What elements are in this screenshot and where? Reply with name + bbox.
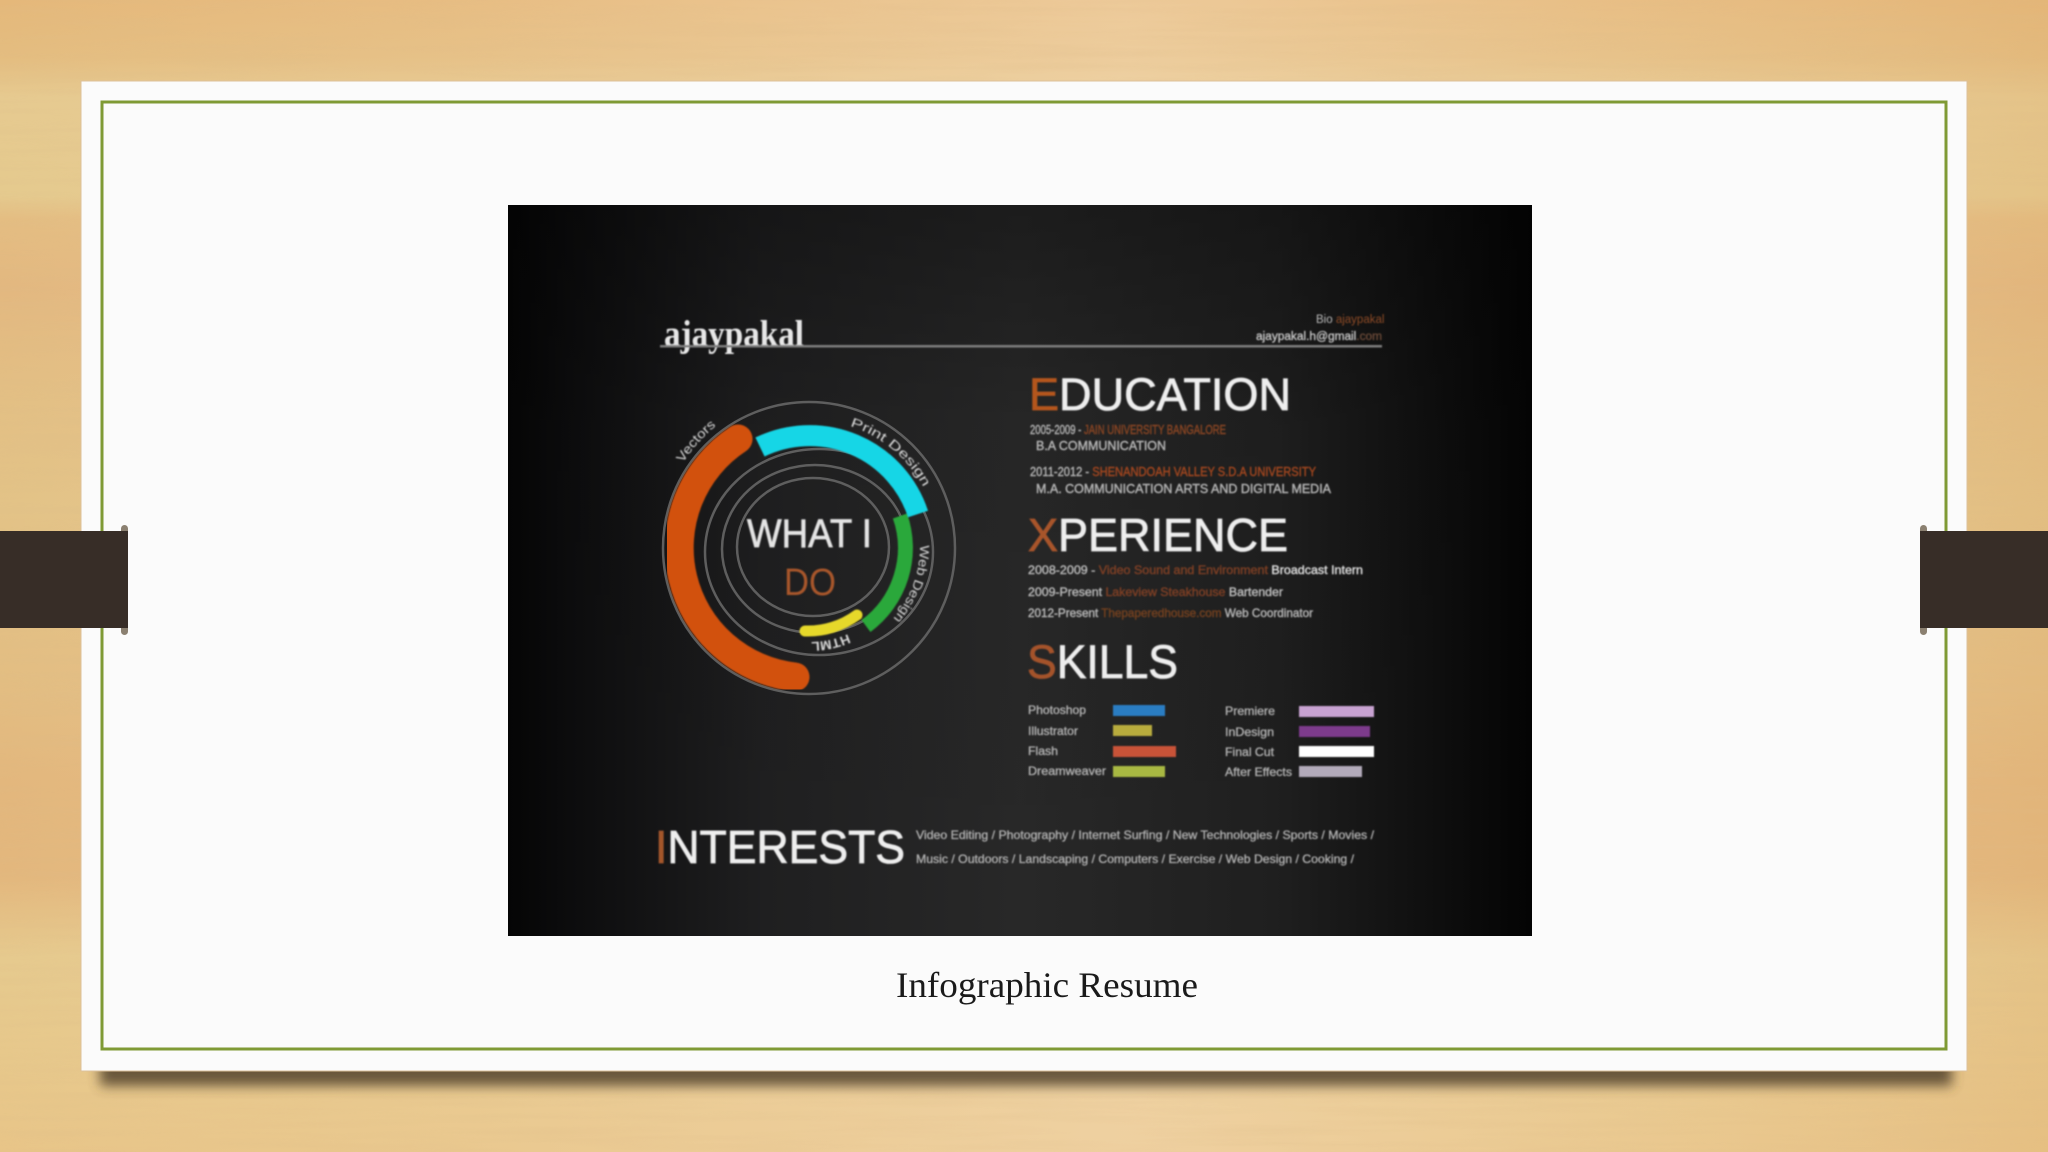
education entries: B.A COMMUNICATION bbox=[1036, 439, 1166, 453]
paper panel bbox=[81, 81, 1967, 1071]
what i do circular chart bbox=[662, 400, 956, 696]
paper shadow bbox=[100, 1056, 1952, 1086]
arc labels: Print Design bbox=[850, 417, 929, 487]
arc labels: HTML bbox=[810, 634, 852, 652]
green border frame bbox=[102, 102, 1946, 1049]
chart rings bbox=[663, 402, 955, 694]
left binding band bbox=[0, 525, 128, 635]
skills section bbox=[1027, 635, 1374, 779]
arc labels bbox=[675, 417, 930, 652]
education section bbox=[1029, 369, 1332, 496]
header rule bbox=[660, 345, 1382, 348]
caption: Infographic Resume bbox=[896, 965, 1198, 1005]
interests heading: INTERESTS bbox=[655, 821, 905, 873]
chart title: WHAT I bbox=[747, 512, 872, 556]
interests list: Music / Outdoors / Landscaping / Computers / Exercise / Web Design / Cooking / bbox=[916, 852, 1355, 866]
resume header bbox=[660, 314, 1384, 355]
skill labels: InDesign bbox=[1225, 725, 1274, 739]
skill labels: Photoshop bbox=[1028, 703, 1086, 717]
experience section bbox=[1028, 509, 1363, 620]
experience entries bbox=[1028, 563, 1363, 620]
chart title: DO bbox=[784, 562, 836, 604]
contact details: ajaypakal.h@gmail .com bbox=[1256, 331, 1382, 343]
skill labels: Final Cut bbox=[1225, 745, 1275, 759]
skills heading: SKILLS bbox=[1027, 635, 1178, 688]
skill labels: Premiere bbox=[1225, 704, 1275, 718]
contact details bbox=[1256, 314, 1384, 343]
skill labels: Dreamweaver bbox=[1028, 764, 1106, 778]
experience entries: 2008-2009 - Video Sound and Environment Broadcast Intern bbox=[1028, 563, 1363, 577]
interests list bbox=[916, 828, 1375, 866]
experience entries: 2012-Present Thepaperedhouse.com Web Coordinator bbox=[1028, 606, 1313, 620]
skill labels bbox=[1028, 703, 1292, 779]
skill labels: After Effects bbox=[1225, 765, 1292, 779]
name logo: ajaypakal bbox=[664, 314, 804, 355]
interests section bbox=[655, 821, 1375, 873]
interests list: Video Editing / Photography / Internet Surfing / New Technologies / Sports / Movies / bbox=[916, 828, 1375, 842]
experience entries: 2009-Present Lakeview Steakhouse Bartender bbox=[1028, 585, 1283, 599]
skill labels: Illustrator bbox=[1028, 724, 1078, 738]
chart arcs bbox=[679, 436, 918, 677]
experience heading: XPERIENCE bbox=[1028, 509, 1288, 561]
education entries: 2011-2012 - SHENANDOAH VALLEY S.D.A UNIVERSITY bbox=[1030, 465, 1317, 479]
contact details: Bio ajaypakal bbox=[1316, 314, 1384, 326]
arc labels: Web Design bbox=[893, 544, 930, 622]
resume image panel bbox=[508, 205, 1532, 936]
education entries bbox=[1030, 423, 1332, 496]
chart title bbox=[747, 512, 872, 604]
education entries: M.A. COMMUNICATION ARTS AND DIGITAL MEDIA bbox=[1036, 482, 1332, 496]
education heading: EDUCATION bbox=[1029, 369, 1291, 420]
right binding band bbox=[1920, 525, 2048, 635]
skill bars bbox=[1113, 705, 1374, 777]
skill labels: Flash bbox=[1028, 744, 1058, 758]
education entries: 2005-2009 - JAIN UNIVERSITY BANGALORE bbox=[1030, 423, 1226, 437]
arc labels: Vectors bbox=[675, 420, 716, 460]
